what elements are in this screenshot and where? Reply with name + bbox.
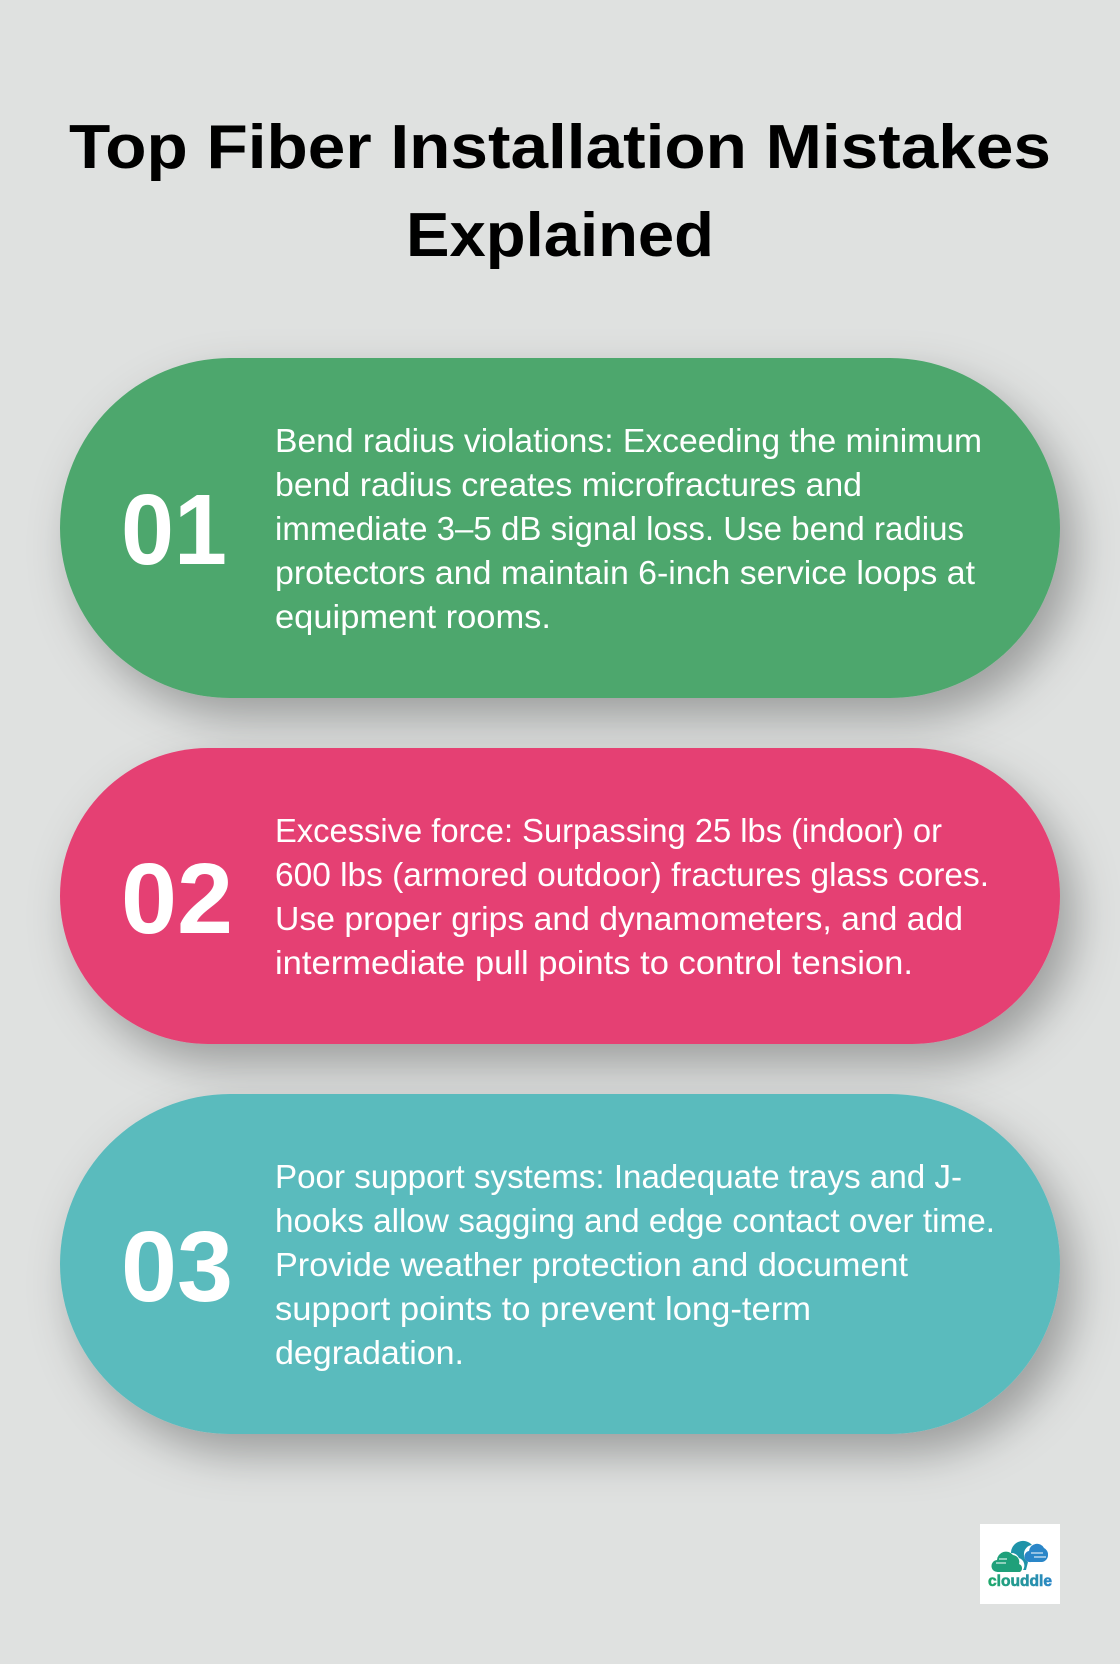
body text 01: immediate 3–5 dB signal loss. Use bend radius bbox=[275, 510, 964, 547]
panel: mistake 02 excessive force bbox=[60, 748, 1060, 1044]
body text 03: support points to prevent long-term bbox=[275, 1290, 811, 1327]
body text 02: intermediate pull points to control tension. bbox=[275, 944, 913, 981]
body text 03: hooks allow sagging and edge contact over time. bbox=[275, 1202, 995, 1239]
pill background teal bbox=[60, 1094, 1060, 1434]
title bbox=[69, 113, 1051, 270]
logo wordmark: clouddle bbox=[988, 1573, 1052, 1590]
number 02: 02 bbox=[121, 843, 233, 955]
body text 01: Bend radius violations: Exceeding the minimum bbox=[275, 422, 982, 459]
body text 01: bend radius creates microfractures and bbox=[275, 466, 862, 503]
body text 03: Poor support systems: Inadequate trays and J- bbox=[275, 1158, 962, 1195]
number 03: 03 bbox=[121, 1211, 233, 1323]
body text 01 bbox=[275, 422, 982, 635]
body text 03: Provide weather protection and document bbox=[275, 1246, 908, 1283]
title: Explained bbox=[406, 201, 714, 270]
body text 01: protectors and maintain 6-inch service loops at bbox=[275, 554, 975, 591]
body text 02: 600 lbs (armored outdoor) fractures glass cores. bbox=[275, 856, 989, 893]
body text 01: equipment rooms. bbox=[275, 598, 551, 635]
body text 03 bbox=[275, 1158, 995, 1371]
pill background green bbox=[60, 358, 1060, 698]
title: Top Fiber Installation Mistakes bbox=[69, 113, 1051, 182]
logo: clouddle bbox=[980, 1524, 1060, 1604]
panel: mistake 03 poor support bbox=[60, 1094, 1060, 1434]
body text 02: Use proper grips and dynamometers, and add bbox=[275, 900, 963, 937]
icon: clouds bbox=[991, 1541, 1048, 1572]
body text 02 bbox=[275, 812, 989, 981]
body text 03: degradation. bbox=[275, 1334, 464, 1371]
pill background pink bbox=[60, 748, 1060, 1044]
body text 02: Excessive force: Surpassing 25 lbs (indoor) or bbox=[275, 812, 942, 849]
panel: mistake 01 bend radius bbox=[60, 358, 1060, 698]
number 01: 01 bbox=[121, 474, 227, 586]
